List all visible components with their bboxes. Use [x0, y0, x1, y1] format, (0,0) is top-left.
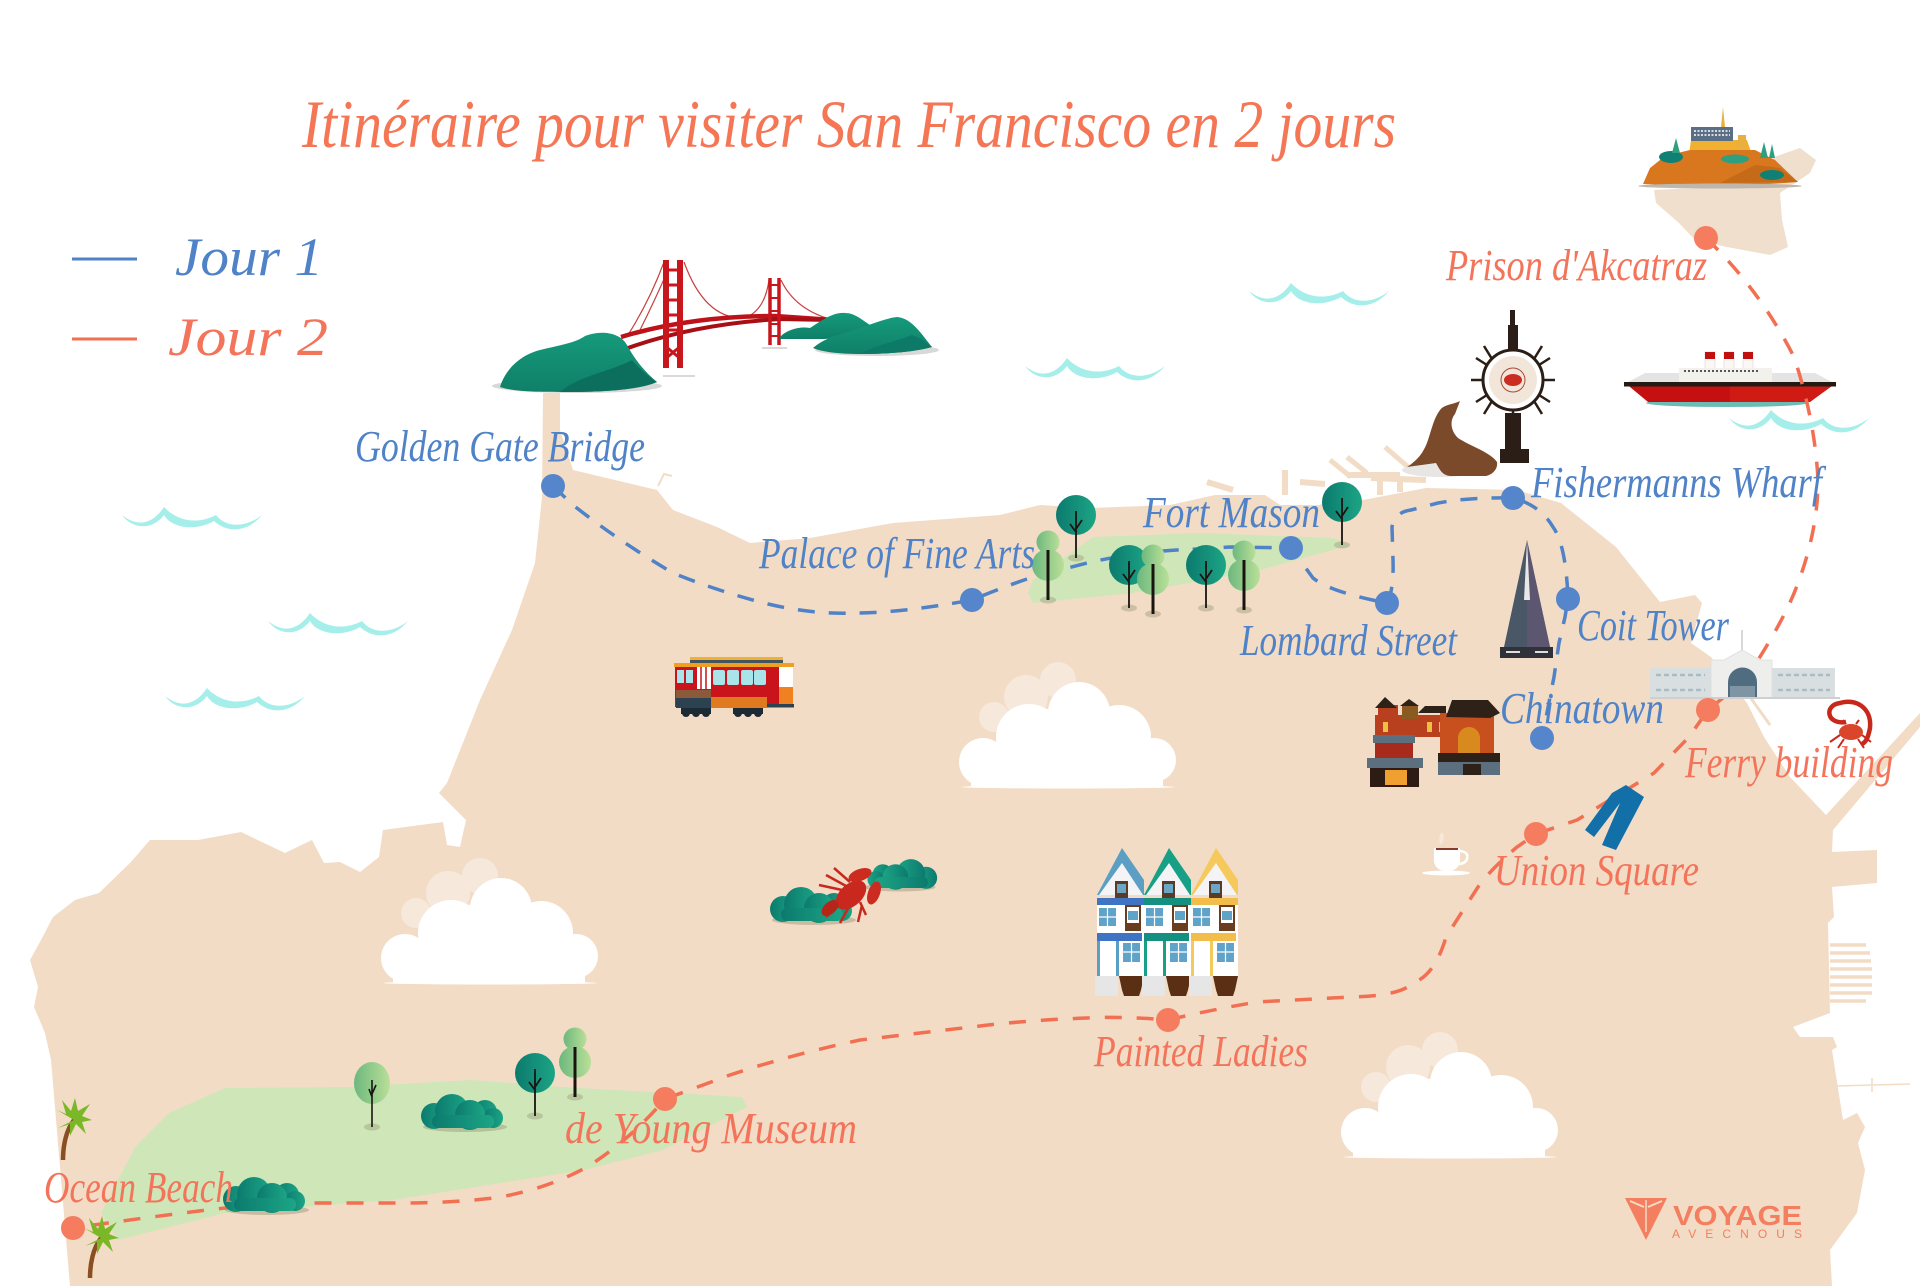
route: day 1 [553, 486, 1568, 738]
icon: Chinatown buildings [1367, 697, 1500, 787]
icon: Fisherman's Wharf wheel [1471, 310, 1555, 463]
title: Itinéraire pour visiter San Francisco en 2 jours [301, 86, 1396, 162]
label: Fishermanns Wharf: Fishermanns Wharf [1530, 458, 1827, 507]
route: day 2 [73, 238, 1818, 1228]
icon: Golden Gate Bridge [492, 260, 939, 393]
legend: day 1 and day 2: Jour 1 [175, 227, 323, 287]
island: Alcatraz land [1654, 148, 1816, 255]
label: Coit Tower: Coit Tower [1577, 601, 1730, 650]
label: Prison d'Alcatraz: Prison d'Akcatraz [1445, 241, 1707, 290]
label: Palace of Fine Arts: Palace of Fine Arts [758, 529, 1035, 578]
logo: Voyage Avecnous: AVECNOUS [1672, 1227, 1802, 1241]
icon: palm trees [57, 1098, 119, 1278]
label: Ocean Beach: Ocean Beach [44, 1163, 233, 1212]
legend: day 1 and day 2 [72, 227, 328, 367]
icon: sea lion [1402, 401, 1497, 477]
icon: crab [1829, 702, 1871, 748]
legend: day 1 and day 2: Jour 2 [168, 307, 328, 367]
icon: ship [1624, 352, 1836, 407]
piers and coastal details [658, 447, 1910, 1092]
icon: jeans [1585, 785, 1644, 850]
route stops: day 2 [61, 226, 1720, 1240]
logo: Voyage Avecnous: VOYAGE [1673, 1200, 1802, 1231]
park: Golden Gate Park [101, 1080, 747, 1240]
icon: Painted Ladies houses [1095, 848, 1238, 996]
label: Lombard Street: Lombard Street [1239, 616, 1458, 665]
label: Union Square: Union Square [1494, 846, 1699, 895]
waves [122, 283, 1869, 710]
clouds [381, 662, 1558, 1158]
trees: Fort Mason park [1032, 482, 1362, 618]
icon: Ferry Building [1650, 630, 1840, 699]
label: Fort Mason: Fort Mason [1142, 488, 1320, 537]
logo: Voyage Avecnous [1625, 1198, 1802, 1241]
icon: Alcatraz island [1638, 107, 1802, 188]
park: Presidio and Fort Mason [1028, 533, 1350, 603]
trees: Golden Gate Park [223, 1028, 591, 1215]
land: San Francisco peninsula [30, 393, 1920, 1286]
label: Chinatown: Chinatown [1500, 684, 1664, 733]
route stops: day 1 [541, 474, 1580, 750]
icon: cable car tram [674, 657, 794, 717]
icon: Transamerica pyramid [1500, 540, 1553, 658]
icon: coffee cup [1422, 832, 1470, 876]
icon: lobster and bushes [770, 859, 937, 925]
label: Painted Ladies: Painted Ladies [1093, 1027, 1308, 1076]
label: Golden Gate Bridge: Golden Gate Bridge [355, 422, 645, 471]
label: de Young Museum: de Young Museum [565, 1104, 857, 1153]
